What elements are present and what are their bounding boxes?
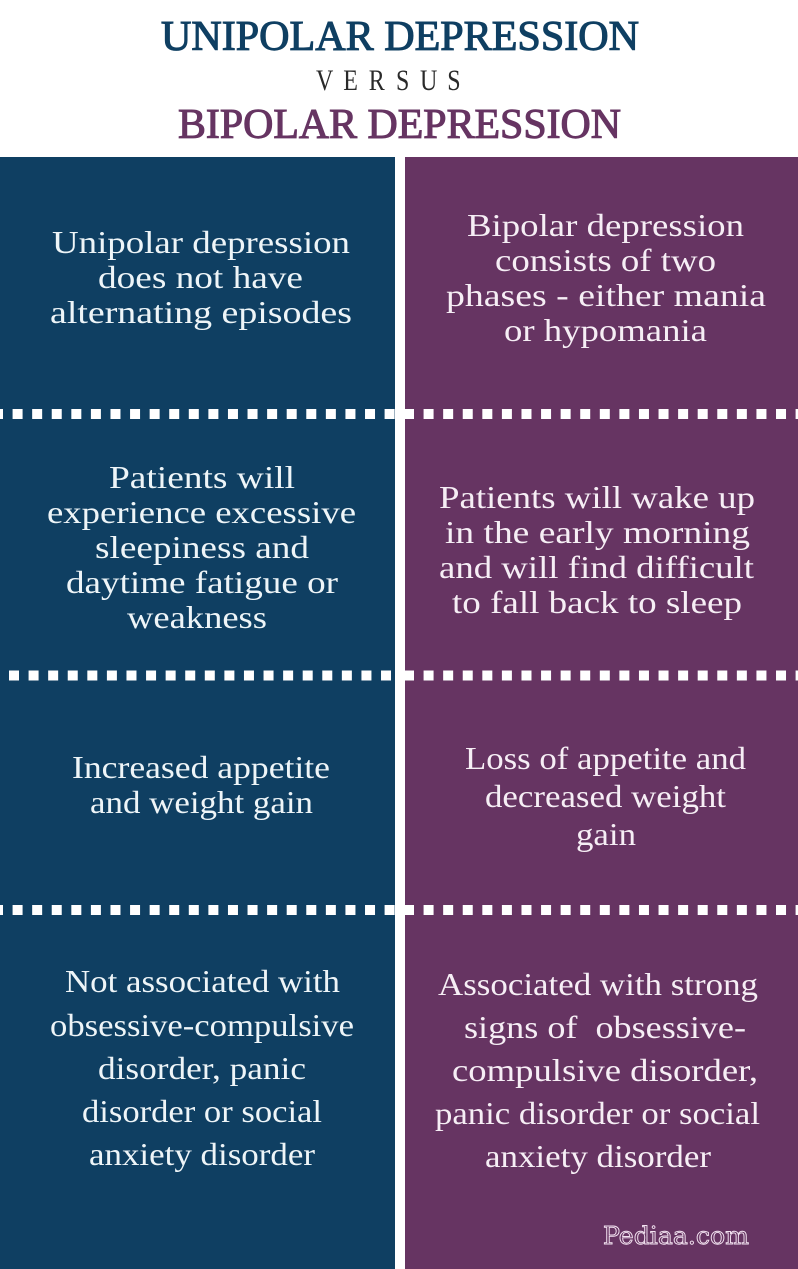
unipolar: alternating episodes: Unipolar depression: [52, 225, 350, 260]
panel: bipolar column: [405, 157, 798, 1269]
unipolar: alternating episodes: alternating episodes: [50, 295, 352, 330]
bipolar: two phases: consists of two: [495, 243, 716, 278]
bipolar: associated disorders: [435, 967, 760, 1174]
unipolar: associated disorders: [50, 964, 354, 1172]
unipolar: appetite: Increased appetite: [72, 750, 330, 785]
unipolar: sleepiness: experience excessive: [47, 495, 356, 530]
bipolar: associated disorders: Associated with strong: [438, 967, 758, 1002]
bipolar: associated disorders: anxiety disorder: [485, 1139, 712, 1174]
bipolar: two phases: Bipolar depression: [467, 208, 744, 243]
logo: Pediaa.com: Pediaa.com: [603, 1222, 749, 1250]
unipolar: associated disorders: Not associated with: [65, 964, 340, 999]
unipolar: alternating episodes: [50, 225, 352, 330]
unipolar: associated disorders: disorder or social: [82, 1094, 322, 1129]
bipolar: two phases: or hypomania: [504, 313, 707, 348]
unipolar: appetite: and weight gain: [90, 785, 313, 820]
bipolar: associated disorders: compulsive disorder,: [452, 1053, 758, 1088]
unipolar: sleepiness: sleepiness and: [95, 530, 309, 565]
unipolar: sleepiness: weakness: [127, 600, 267, 635]
unipolar: associated disorders: anxiety disorder: [89, 1137, 316, 1172]
bipolar: appetite: gain: [576, 817, 636, 852]
bipolar: early waking: Patients will wake up: [439, 480, 755, 515]
heading: unipolar depression: UNIPOLAR DEPRESSION: [161, 14, 639, 60]
panel: unipolar column: [0, 157, 395, 1269]
bipolar: early waking: [439, 480, 755, 620]
bipolar: appetite: Loss of appetite and: [465, 741, 746, 776]
bipolar: early waking: to fall back to sleep: [452, 585, 742, 620]
heading: versus: VERSUS: [316, 63, 461, 97]
unipolar: appetite: [72, 750, 330, 820]
bipolar: appetite: decreased weight: [485, 779, 726, 814]
bipolar: appetite: [465, 741, 746, 852]
bipolar: associated disorders: signs of obsessive-: [464, 1010, 746, 1045]
unipolar: associated disorders: disorder, panic: [98, 1051, 306, 1086]
unipolar: alternating episodes: does not have: [98, 260, 303, 295]
bipolar: early waking: in the early morning: [445, 515, 750, 550]
unipolar: sleepiness: [47, 460, 356, 635]
heading: bipolar depression: BIPOLAR DEPRESSION: [178, 102, 621, 148]
bipolar: early waking: and will find difficult: [439, 550, 754, 585]
unipolar: sleepiness: Patients will: [109, 460, 295, 495]
bipolar: two phases: [446, 208, 766, 348]
unipolar: associated disorders: obsessive-compulsive: [50, 1008, 354, 1043]
unipolar: sleepiness: daytime fatigue or: [66, 565, 339, 600]
bipolar: two phases: phases - either mania: [446, 278, 766, 313]
title: [161, 14, 639, 148]
bipolar: associated disorders: panic disorder or social: [435, 1096, 760, 1131]
